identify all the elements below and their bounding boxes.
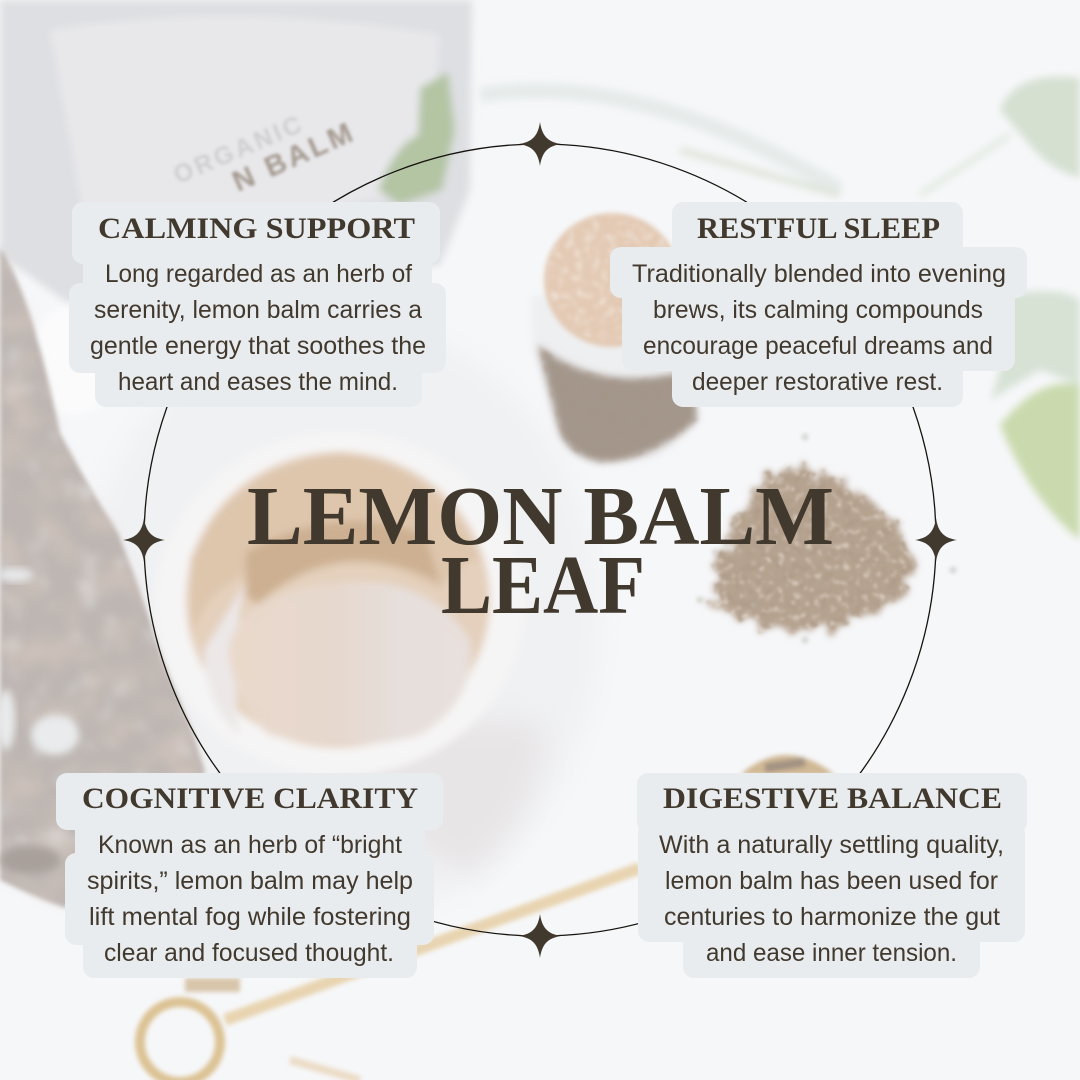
photo: product bag <box>0 0 472 305</box>
heading: digestive balance: DIGESTIVE BALANCE <box>663 782 1002 815</box>
text: cognitive clarity body: spirits,” lemon balm may help <box>87 867 413 895</box>
panel: calming support <box>69 202 446 407</box>
heading: calming support: CALMING SUPPORT <box>98 212 415 245</box>
photo: bag label text: N BALM <box>228 116 360 198</box>
photo: cup saucer <box>330 720 545 875</box>
photo: loose tea pile <box>697 434 956 643</box>
photo: bag label text: ORGANIC <box>169 109 308 190</box>
title <box>247 470 834 632</box>
heading: cognitive clarity: COGNITIVE CLARITY <box>82 782 418 815</box>
icon: star top <box>519 122 561 166</box>
text: digestive balance body: With a naturally settling quality, <box>659 831 1004 859</box>
text: restful sleep body: Traditionally blended into evening <box>632 260 1006 288</box>
photo: cup <box>156 432 524 776</box>
text: digestive balance body: centuries to harmonize the gut <box>664 903 1000 931</box>
photo: bark log <box>0 248 205 908</box>
photo: bag label text <box>169 109 360 198</box>
photo: gold scoop <box>140 755 835 1080</box>
heading: restful sleep: RESTFUL SLEEP <box>697 212 940 245</box>
text: calming support body <box>90 260 426 396</box>
panel: restful sleep <box>610 202 1027 407</box>
icon: star right <box>915 518 957 562</box>
text: calming support body: serenity, lemon balm carries a <box>94 296 422 324</box>
text: cognitive clarity body <box>87 831 413 967</box>
text: digestive balance body: lemon balm has been used for <box>665 867 998 895</box>
icon: star left <box>123 518 165 562</box>
circle frame <box>123 122 957 958</box>
title: LEMON BALM <box>247 470 834 563</box>
photo: mint leaves <box>480 77 1080 540</box>
text: digestive balance body <box>659 831 1004 967</box>
text: calming support body: heart and eases the mind. <box>118 368 398 396</box>
photo: glass jar <box>531 213 698 462</box>
panel: cognitive clarity <box>56 773 443 978</box>
icon: star bottom <box>519 914 561 958</box>
text: digestive balance body: and ease inner tension. <box>706 939 957 967</box>
text: calming support body: gentle energy that soothes the <box>90 332 426 360</box>
text: cognitive clarity body: lift mental fog while fostering <box>89 903 411 931</box>
text: restful sleep body <box>632 260 1006 396</box>
photo: white tabletop highlight <box>30 305 120 415</box>
text: cognitive clarity body: clear and focused thought. <box>104 939 394 967</box>
title: LEAF <box>441 539 645 632</box>
text: calming support body: Long regarded as an herb of <box>105 260 412 288</box>
text: cognitive clarity body: Known as an herb of “bright <box>98 831 402 859</box>
text: restful sleep body: encourage peaceful dreams and <box>643 332 993 360</box>
text: restful sleep body: deeper restorative rest. <box>692 368 943 396</box>
panel: digestive balance <box>637 773 1027 978</box>
text: restful sleep body: brews, its calming compounds <box>653 296 983 324</box>
